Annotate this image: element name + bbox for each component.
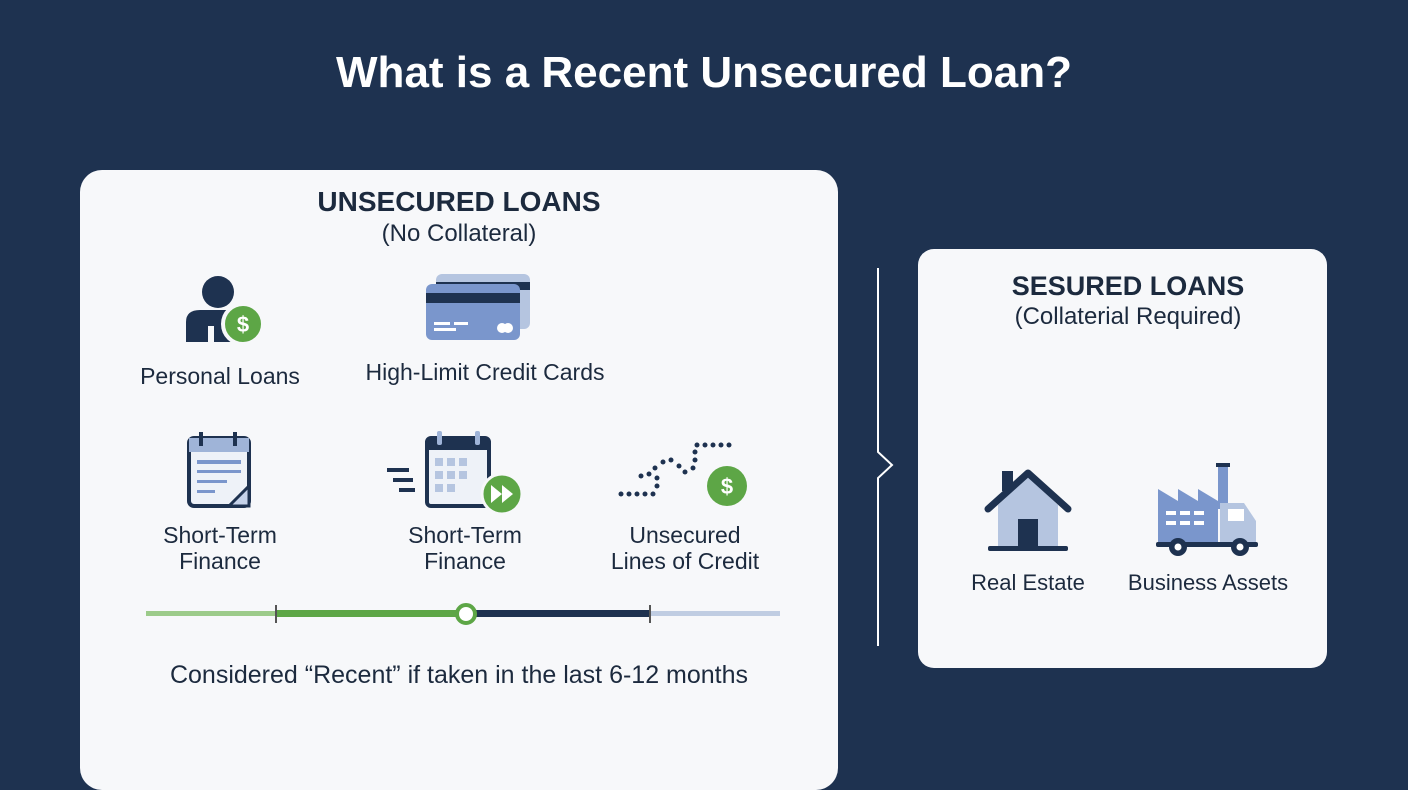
heading: unsecured: UNSECURED LOANS: [317, 186, 601, 217]
icon: person with dollar: [186, 276, 261, 342]
label: short-term finance 1: Short-Term: [163, 522, 277, 548]
label: business assets: Business Assets: [1128, 570, 1288, 595]
heading: secured: SESURED LOANS: [1012, 271, 1244, 301]
title: What is a Recent Unsecured Loan?: [336, 48, 1072, 97]
label: short-term finance 2: Short-Term: [408, 522, 522, 548]
heading: unsecured: (No Collateral): [382, 220, 536, 247]
icon: factory truck: [1156, 463, 1258, 556]
caption: recent definition: Considered “Recent” if taken in the last 6-12 months: [170, 661, 748, 689]
icon: dotted line of credit: $: [721, 474, 733, 499]
bracket divider: [877, 268, 894, 646]
icon: house: [984, 470, 1072, 551]
heading: secured: [1012, 271, 1244, 330]
icon: calendar fast-forward: [387, 431, 520, 512]
heading: secured: (Collaterial Required): [1015, 303, 1241, 330]
label: unsecured lines of credit: Unsecured: [629, 522, 741, 548]
label: short-term finance 1: Finance: [179, 548, 261, 574]
icon: calendar document: [187, 432, 251, 508]
label: personal loans: Personal Loans: [140, 363, 300, 389]
heading: unsecured: [317, 186, 601, 247]
label: real estate: Real Estate: [971, 570, 1085, 595]
label: unsecured lines of credit: Lines of Credit: [611, 548, 759, 574]
icon: dotted line of credit: [618, 442, 747, 506]
label: short-term finance 2: Finance: [424, 548, 506, 574]
icon: credit cards: [426, 274, 530, 340]
timeline bar: [146, 603, 780, 625]
icon: person with dollar: $: [237, 312, 249, 337]
panel: secured loans: [918, 249, 1327, 668]
label: short-term finance 1: [163, 522, 277, 574]
label: short-term finance 2: [408, 522, 522, 574]
label: credit cards: High-Limit Credit Cards: [365, 359, 604, 385]
panel: unsecured loans: [80, 170, 838, 790]
label: unsecured lines of credit: [611, 522, 759, 574]
